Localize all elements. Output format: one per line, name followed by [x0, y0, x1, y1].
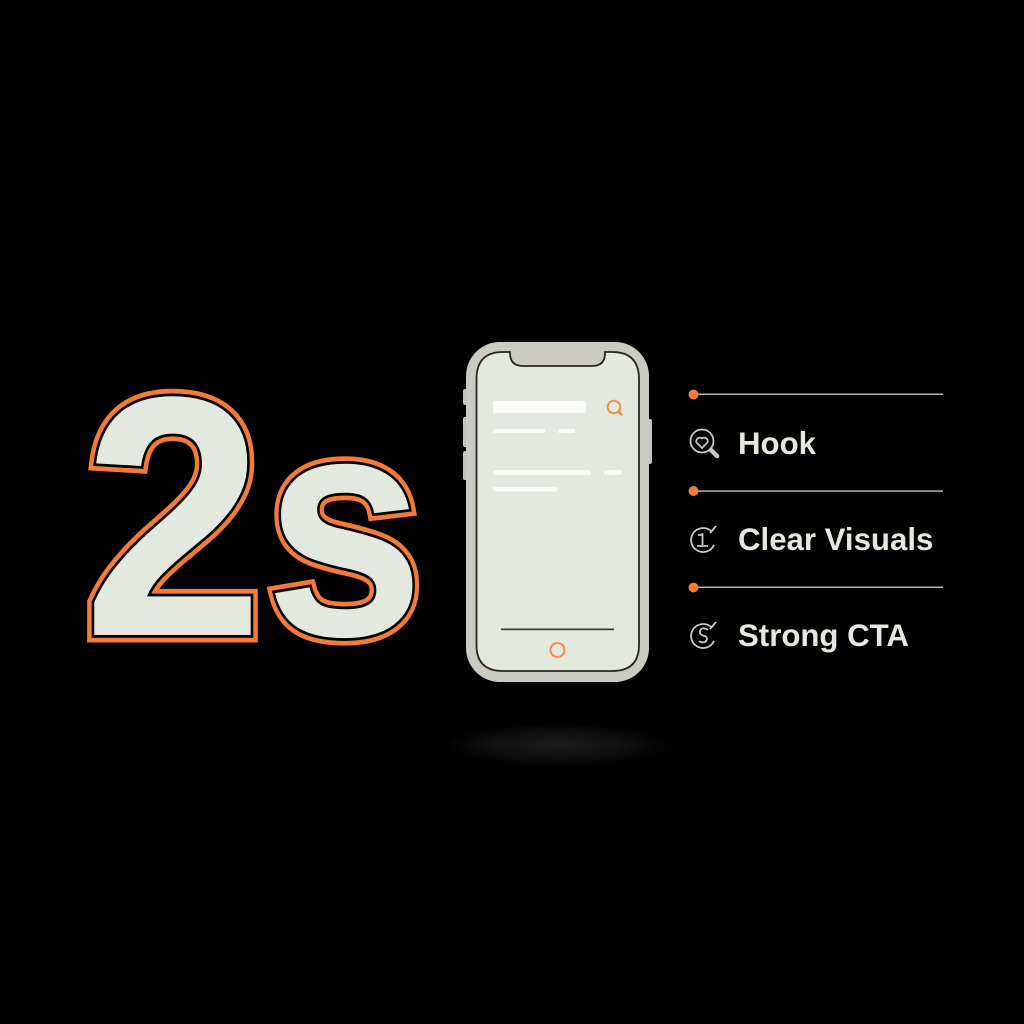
item: Hook: [690, 426, 817, 461]
side buttons: [463, 389, 652, 480]
headline: 2s: [83, 325, 424, 708]
item: Clear Visuals: [691, 522, 933, 557]
digit 2: 2: [83, 325, 264, 708]
digit 2: 2: [83, 325, 264, 708]
phone screen: [476, 352, 639, 671]
digit 2: 2: [83, 325, 264, 708]
icon: search: [608, 401, 622, 415]
phone shadow: [440, 723, 676, 767]
letter s: s: [265, 348, 424, 703]
label: Hook: [738, 426, 817, 461]
divider 1: [688, 390, 943, 400]
divider 2: [688, 486, 943, 496]
icon: magnifier with heart: [690, 430, 717, 456]
phone: [463, 342, 652, 682]
home indicator line: [501, 628, 614, 630]
label: Clear Visuals: [738, 522, 933, 557]
divider 3: [688, 582, 943, 592]
icon: circled mark: [691, 622, 716, 648]
item: Strong CTA: [691, 618, 909, 653]
label: Strong CTA: [738, 618, 909, 653]
checklist: [688, 390, 943, 653]
letter s: s: [265, 348, 424, 703]
home button: [550, 643, 564, 657]
icon: circled mark: [691, 526, 716, 552]
screen content bars: [493, 401, 622, 492]
phone body: [466, 342, 649, 682]
letter s: s: [265, 348, 424, 703]
